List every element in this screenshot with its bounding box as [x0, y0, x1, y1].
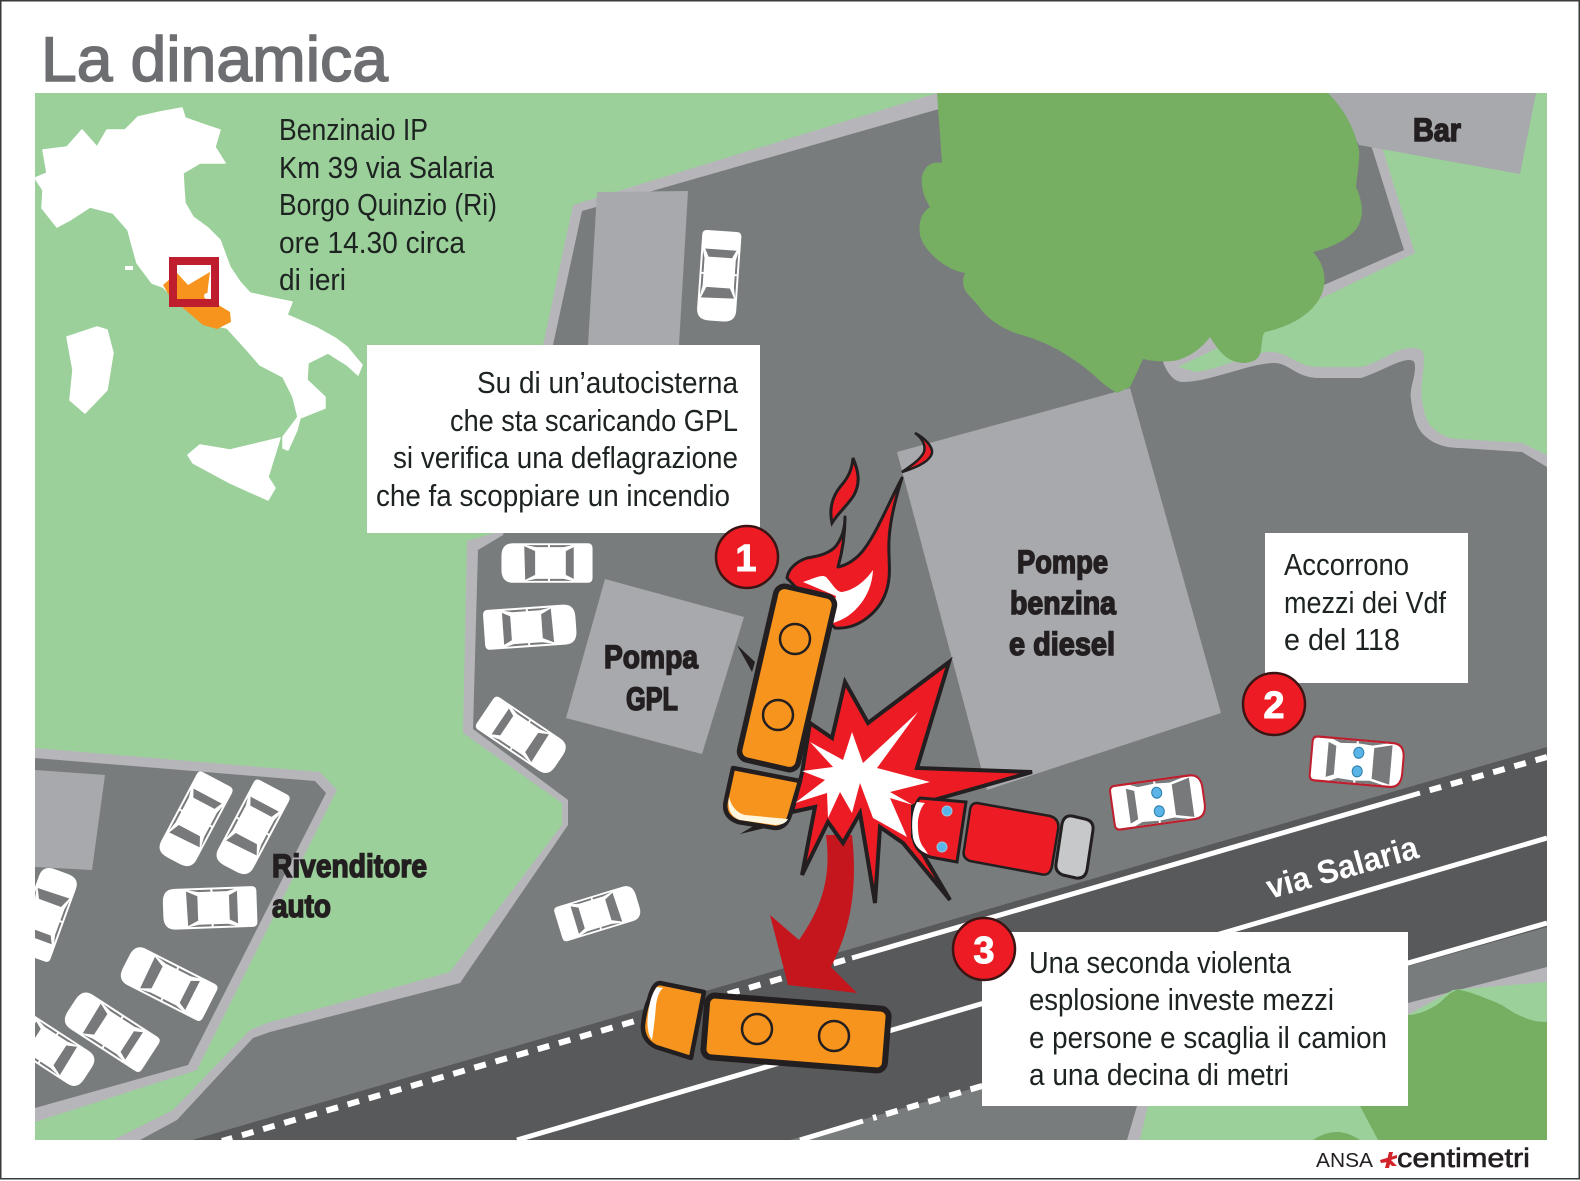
- location text: Km 39 via Salaria: [279, 150, 495, 185]
- lower right trees: [1313, 990, 1547, 1140]
- callout: step 3: esplosione investe mezzi: [1029, 982, 1334, 1017]
- Sardinia: [67, 327, 113, 413]
- arrow: truck thrown: [770, 835, 857, 993]
- lane line: centre: [517, 838, 1547, 1140]
- lane line: top dashed left: [222, 960, 845, 1141]
- Rieti dot: [204, 293, 210, 299]
- rear: [1056, 816, 1093, 878]
- credit: ANSA Centimetri: centimetri: [1397, 1143, 1530, 1173]
- mainland: [35, 108, 362, 450]
- Elba: [125, 266, 133, 270]
- place labels: [272, 112, 1461, 924]
- step marker 1: [716, 526, 778, 588]
- explosion: [792, 662, 1032, 903]
- location square: [173, 261, 215, 303]
- step marker 2: [1243, 673, 1305, 735]
- lower right lawn: [1448, 982, 1538, 993]
- tank hatches: [742, 1014, 772, 1044]
- tanker thrown onto road: [643, 983, 889, 1071]
- location text: ore 14.30 circa: [279, 225, 466, 260]
- lane line: top dashed right: [1420, 757, 1547, 793]
- dealer lot kerb: [35, 748, 337, 1122]
- place labels: auto: [272, 888, 331, 924]
- ambulance car: right: [1309, 736, 1405, 788]
- fire truck: [912, 798, 1093, 878]
- credit: ANSA Centimetri: ANSA: [1316, 1150, 1374, 1172]
- title: La dinamica: [41, 25, 389, 95]
- flames: [787, 433, 932, 628]
- building: Pompe benzina e diesel: [897, 388, 1221, 790]
- lane line: top solid: [852, 793, 1420, 958]
- ambulance car: left: [1109, 774, 1207, 830]
- flame spark: [902, 433, 932, 472]
- cab: [725, 768, 800, 828]
- cab windscreen: [912, 802, 928, 854]
- road label: via Salaria: [1262, 828, 1423, 906]
- flame highlight: [803, 570, 873, 624]
- place labels: e diesel: [1009, 626, 1115, 662]
- road: via Salaria: [192, 747, 1547, 1141]
- callout: step 1: che fa scoppiare un incendio: [376, 478, 730, 513]
- callout: step 3: a una decina di metri: [1029, 1057, 1289, 1092]
- explosion core: [795, 712, 930, 837]
- callout: step 2: mezzi dei Vdf: [1284, 585, 1446, 620]
- place labels: Pompa: [604, 639, 698, 675]
- step marker 2: 2: [1263, 685, 1285, 727]
- callout: step 1: si verifica una deflagrazione: [393, 440, 738, 475]
- step marker 3: [953, 918, 1015, 980]
- place labels: benzina: [1010, 585, 1116, 621]
- cab windscreen: [728, 797, 788, 825]
- step marker 3: 3: [973, 930, 995, 972]
- place labels: Pompe: [1017, 544, 1108, 580]
- cab lights: [942, 806, 952, 816]
- callout: step 3: [982, 932, 1408, 1106]
- flame tongue: [831, 458, 858, 523]
- building: Pompa GPL: [566, 579, 744, 754]
- Sicily: [188, 438, 280, 500]
- callout: step 1: che sta scaricando GPL: [450, 403, 738, 438]
- callout: step 3: e persone e scaglia il camion: [1029, 1020, 1387, 1055]
- callout: step 3: Una seconda violenta: [1029, 945, 1292, 980]
- Lazio region: [163, 272, 231, 329]
- callout: step 1: [367, 345, 760, 533]
- place labels: GPL: [626, 681, 678, 717]
- lane line: lower end: [800, 1121, 863, 1140]
- tank: [703, 995, 889, 1071]
- cab windscreen: [648, 987, 663, 1040]
- forecourt asphalt: [140, 93, 1547, 1140]
- tank hatches: [780, 624, 810, 654]
- callout: step 2: e del 118: [1284, 622, 1400, 657]
- callout: step 1: Su di un’autocisterna: [477, 365, 739, 400]
- step marker 1: 1: [735, 538, 757, 580]
- credit: ANSA Centimetri: [1316, 1143, 1530, 1173]
- dealer office block: [35, 770, 105, 870]
- location text: di ieri: [279, 262, 346, 297]
- callout: step 2: [1265, 533, 1468, 683]
- location text: Benzinaio IP: [279, 112, 428, 147]
- callout: step 2: Accorrono: [1284, 547, 1409, 582]
- mirror spikes: [737, 645, 765, 834]
- large tree: [919, 93, 1362, 393]
- dealer lot asphalt: [35, 758, 326, 1108]
- place labels: Bar: [1413, 112, 1461, 148]
- building: Bar: [1328, 93, 1536, 174]
- location text: [279, 112, 497, 297]
- cab: [913, 798, 966, 862]
- lane line: lower solid: [982, 923, 1547, 1086]
- body: [964, 803, 1058, 875]
- map: Italy locator: [35, 108, 362, 500]
- building: top canopy: [588, 191, 688, 345]
- tanker at pumps: [725, 585, 836, 834]
- lane line: lower dashed: [873, 1086, 982, 1118]
- credit mark: [1380, 1152, 1397, 1168]
- tank: [738, 585, 836, 771]
- parked cars: [2, 230, 742, 1090]
- cab: [643, 983, 704, 1058]
- place labels: Rivenditore: [272, 848, 427, 884]
- location text: Borgo Quinzio (Ri): [279, 187, 497, 222]
